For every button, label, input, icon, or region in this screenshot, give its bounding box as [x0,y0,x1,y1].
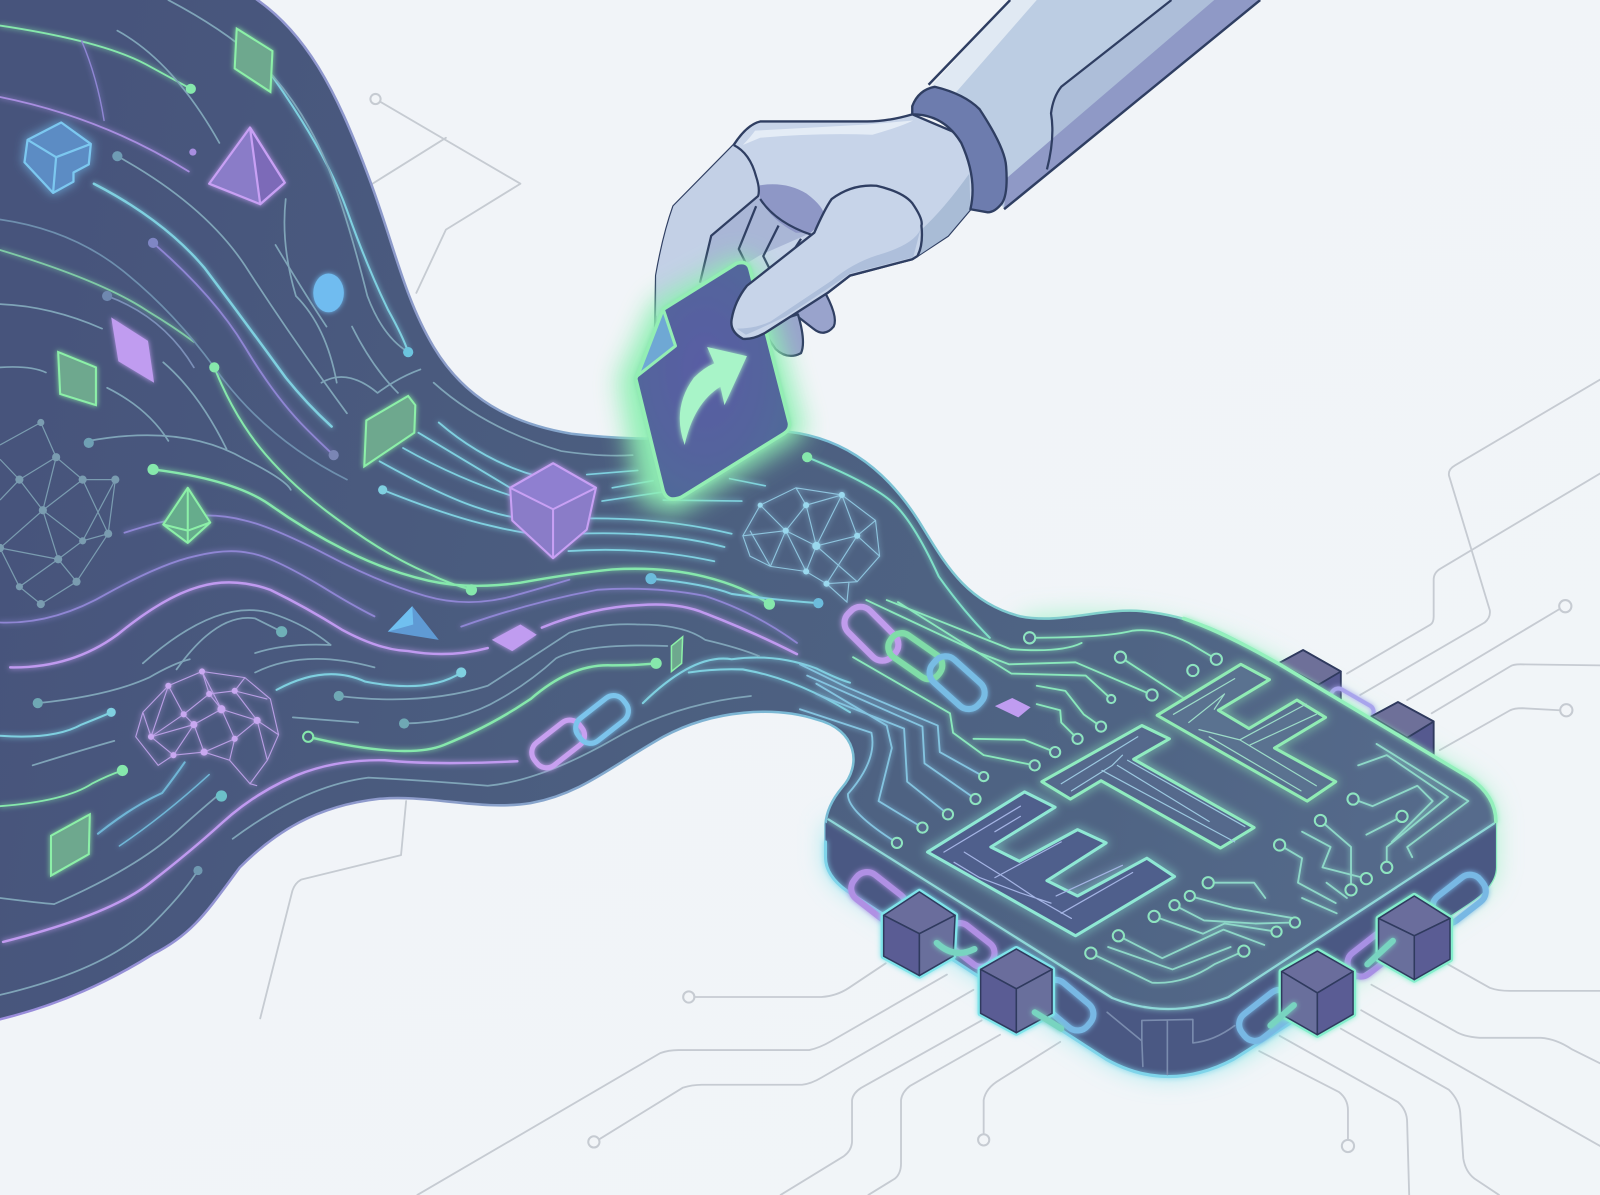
icon: blue cube [24,122,91,193]
icon: purple pyramid [209,128,285,204]
robot thumb [731,186,922,339]
robot cuff [912,87,1007,212]
chip traces [853,600,1216,765]
back cube right [1371,702,1434,755]
robot arm [929,0,1260,209]
icon: green square [58,352,96,405]
neural network: left [0,419,119,608]
icon: purple chip fragment [995,698,1031,717]
letter T outline [1042,726,1254,848]
letter H outline [1157,664,1336,801]
side chain links [846,867,1491,1046]
back cube left [1279,650,1341,709]
stream end dots [33,84,823,875]
thumb shading [737,230,920,335]
robot hand palm [655,114,982,327]
neural network: blue brain [743,488,880,602]
icon: blue blob [313,274,344,312]
token card [617,255,806,515]
icon: purple rhombus [492,625,537,651]
icon: green shield [364,396,415,466]
neural network: purple brain [136,668,279,786]
icon: green pyramid [163,488,210,543]
stream lines: green [0,26,769,806]
icon: green square lower [51,814,90,876]
link clasps [937,941,1393,1029]
chip trace pads [892,632,1408,959]
icon: green sliver [671,637,683,671]
chip back edge highlight [1184,618,1496,821]
chip traces: blue side [800,664,984,843]
letter E outline [928,792,1174,936]
chip side face [826,819,1496,1077]
icon: green diamond top [235,29,272,92]
cube 1 [884,892,955,976]
chain: stream lower [527,691,633,773]
icon: purple cube [510,463,596,558]
chip traces: right side [1091,744,1468,983]
icon: blue pyramid [388,606,439,640]
stream lines: purple [0,41,797,942]
cube 2 [981,949,1052,1033]
glow behind chip [826,614,1496,1077]
robot hand fingers behind [760,288,835,356]
cube 4 [1379,896,1450,980]
back link [1327,686,1376,723]
icon: purple diamond [111,317,154,383]
stream lines: teal and blue [0,77,990,846]
upload arrow [680,347,747,445]
stream lines: muted slate-teal [0,0,759,995]
background circuit traces [260,94,1600,1195]
cube 3 [1282,951,1353,1035]
chain: stream upper [839,601,990,715]
